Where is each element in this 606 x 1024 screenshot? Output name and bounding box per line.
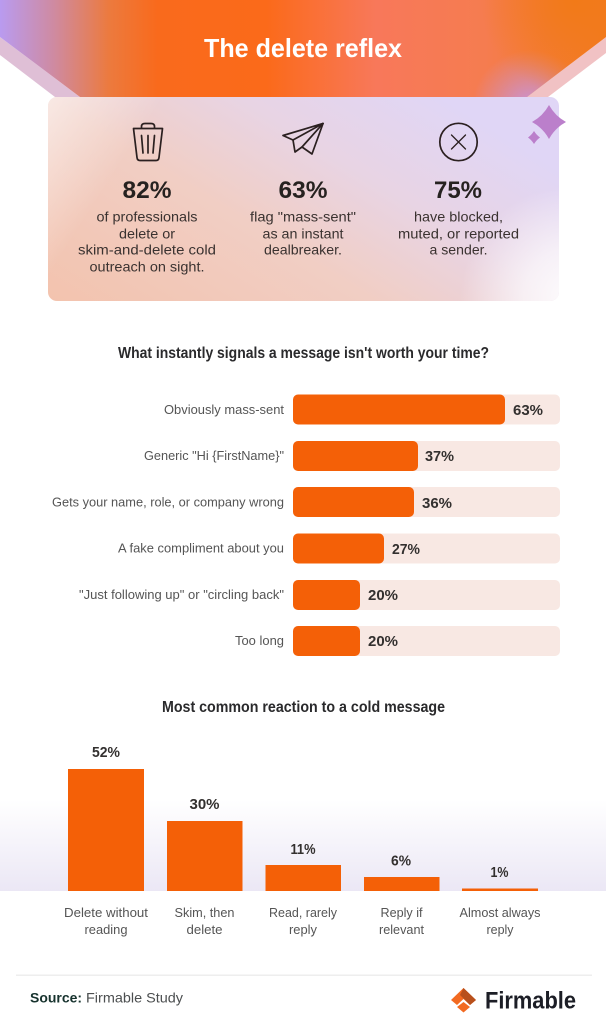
header banner — [0, 0, 606, 97]
logo: Firmable — [451, 988, 576, 1014]
stat: 63%: as an instant — [262, 226, 344, 242]
stat: 75%: a sender. — [430, 242, 488, 258]
stat: 82%: of professionals — [96, 208, 198, 224]
row: following up: 20% — [368, 587, 398, 604]
title: The delete reflex — [204, 33, 403, 63]
row: fake compliment: 27% — [392, 541, 420, 558]
icon: circled x — [440, 123, 477, 161]
row: obviously mass-sent: 63% — [513, 402, 543, 419]
logo: Firmable: Firmable — [485, 988, 576, 1014]
row: too long: Too long — [235, 633, 284, 648]
stat: 63%: 63% — [278, 177, 328, 204]
stat: 63%: dealbreaker. — [264, 242, 342, 258]
column: almost always reply: reply — [486, 922, 514, 937]
column: skim then delete: 30% — [190, 796, 220, 813]
heading: column chart: Most common reaction to a cold message — [162, 699, 445, 716]
column: skim then delete: delete — [186, 922, 222, 937]
row: generic greeting: 37% — [425, 448, 454, 465]
row: too long: 20% — [368, 633, 398, 650]
stat: 75%: 75% — [434, 177, 482, 204]
icon: sparkles — [528, 105, 566, 144]
row: generic greeting — [144, 441, 560, 471]
column: delete without reading: Delete without — [64, 905, 148, 920]
column: read rarely reply: reply — [289, 922, 317, 937]
icon: paper plane — [283, 124, 323, 154]
panel: key statistics — [48, 97, 559, 301]
row: wrong details: Gets your name, role, or company wrong — [52, 494, 284, 510]
stat: 75%: muted, or reported — [398, 226, 519, 242]
stat: 82%: skim-and-delete cold — [78, 242, 216, 258]
row: too long — [235, 626, 560, 656]
stat: 75%: have blocked, — [414, 208, 503, 224]
column: reply if relevant: 6% — [391, 852, 411, 870]
column: almost always reply — [460, 864, 541, 937]
column: skim then delete: Skim, then — [174, 905, 234, 920]
row: wrong details: 36% — [422, 495, 452, 512]
icon: trash can — [134, 124, 162, 160]
stat: 82% — [78, 124, 216, 274]
row: obviously mass-sent: Obviously mass-sent — [164, 402, 284, 417]
stat: 63%: flag "mass-sent" — [250, 208, 356, 224]
heading: bar chart: What instantly signals a message isn't worth your time? — [118, 345, 489, 362]
column: reply if relevant: Reply if — [380, 905, 423, 920]
source note: Source: — [30, 990, 82, 1006]
row: fake compliment: A fake compliment about you — [118, 540, 284, 556]
stat: 63% — [250, 124, 356, 258]
column: read rarely reply — [266, 841, 341, 937]
column: reply if relevant: relevant — [379, 922, 424, 937]
column: read rarely reply: 11% — [290, 841, 316, 858]
bar chart: message signals — [52, 394, 560, 656]
row: fake compliment — [118, 534, 560, 564]
column chart: reactions — [0, 744, 606, 937]
source note — [30, 990, 183, 1006]
row: generic greeting: Generic "Hi {FirstName}" — [144, 448, 284, 463]
column: delete without reading — [64, 744, 148, 937]
column: reply if relevant — [364, 852, 440, 937]
stat: 75% — [398, 123, 519, 258]
row: following up — [79, 580, 560, 610]
column: almost always reply: Almost always — [460, 905, 541, 920]
stat: 82%: delete or — [119, 226, 175, 242]
column: delete without reading: 52% — [92, 744, 120, 761]
stat: 82%: outreach on sight. — [90, 258, 204, 274]
source note: Firmable Study — [86, 990, 183, 1006]
row: obviously mass-sent — [164, 394, 560, 424]
row: following up: "Just following up" or "circling back" — [79, 587, 284, 602]
column: skim then delete — [167, 796, 242, 937]
column: almost always reply: 1% — [490, 864, 508, 881]
column: read rarely reply: Read, rarely — [269, 905, 337, 920]
column: delete without reading: reading — [84, 922, 128, 937]
icon: logo mark — [451, 988, 476, 1012]
row: wrong details — [52, 487, 560, 517]
stat: 82%: 82% — [122, 177, 172, 204]
